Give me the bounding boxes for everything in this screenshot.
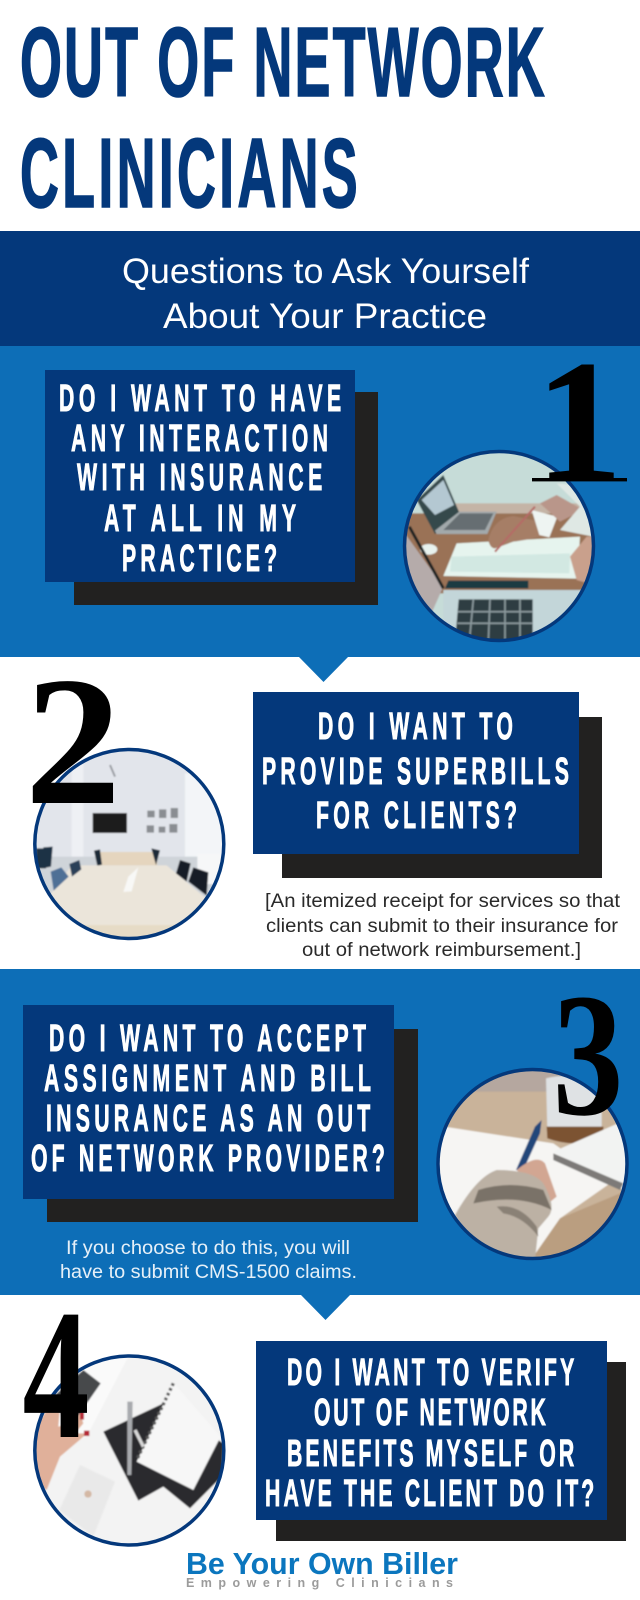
- question 4 box: BENEFITS MYSELF OR: [287, 1431, 574, 1475]
- question 1 box: WITH INSURANCE: [77, 455, 322, 499]
- photo: white conference room: [30, 743, 230, 950]
- number 4: 4: [23, 1273, 89, 1478]
- superbill explanation note: out of network reimbursement.]: [302, 939, 581, 961]
- title: [20, 7, 545, 228]
- question 2 box: PROVIDE SUPERBILLS: [262, 749, 569, 793]
- question 4 drop shadow: [276, 1362, 626, 1541]
- question 1 box: ANY INTERACTION: [71, 416, 328, 460]
- CMS-1500 note: [60, 1238, 357, 1283]
- question 4 box: OUT OF NETWORK: [314, 1390, 546, 1434]
- subtitle banner: Questions to Ask Yourself: [122, 252, 529, 291]
- question 4 box: HAVE THE CLIENT DO IT?: [265, 1471, 594, 1515]
- logo: Be Your Own Biller: Be Your Own Biller: [186, 1546, 458, 1581]
- question 2 box: [253, 692, 579, 854]
- question 3 box: DO I WANT TO ACCEPT: [49, 1016, 366, 1060]
- subtitle banner: [0, 231, 640, 346]
- subtitle banner: About Your Practice: [163, 297, 487, 336]
- question 1 drop shadow: [74, 392, 378, 605]
- number 1: 1: [535, 324, 623, 518]
- superbill explanation note: clients can submit to their insurance for: [266, 915, 619, 937]
- question 1 box: DO I WANT TO HAVE: [59, 376, 341, 420]
- superbill explanation note: [An itemized receipt for services so that: [265, 890, 621, 912]
- superbill explanation note: [265, 890, 621, 961]
- question 3 box: OF NETWORK PROVIDER?: [31, 1136, 385, 1180]
- panel: question 2: [32, 681, 620, 960]
- question 3 drop shadow: [47, 1029, 418, 1222]
- panel: question 3: [0, 958, 640, 1320]
- photo: desk with phone and notebook: [30, 1350, 230, 1550]
- CMS-1500 note: have to submit CMS-1500 claims.: [60, 1262, 357, 1283]
- question 3 box: INSURANCE AS AN OUT: [46, 1096, 370, 1140]
- question 1 box: AT ALL IN MY: [104, 496, 296, 540]
- question 1 box: [45, 370, 355, 582]
- photo: laptops and hand writing on paper: [397, 447, 603, 647]
- CMS-1500 note: If you choose to do this, you will: [66, 1238, 350, 1259]
- question 4 box: [256, 1341, 607, 1520]
- panel 1 background with pointer: [0, 346, 640, 682]
- question 2 box: FOR CLIENTS?: [316, 793, 517, 837]
- photo: hand writing with pen: [433, 1065, 633, 1265]
- question 1 box: PRACTICE?: [122, 536, 277, 580]
- question 3 box: [23, 1005, 394, 1199]
- number 2: 2: [25, 639, 121, 843]
- panel: question 1: [0, 324, 640, 682]
- title: CLINICIANS: [20, 118, 358, 228]
- logo: Be Your Own Biller: Empowering Clinicians: [186, 1576, 453, 1590]
- title: OUT OF NETWORK: [20, 7, 545, 117]
- question 2 box: DO I WANT TO: [318, 704, 513, 748]
- number 3: 3: [553, 958, 623, 1153]
- question 3 box: ASSIGNMENT AND BILL: [44, 1056, 371, 1100]
- panel 3 background with pointer: [0, 969, 640, 1320]
- question 4 box: DO I WANT TO VERIFY: [287, 1350, 575, 1394]
- panel: question 4: [24, 1314, 626, 1547]
- question 2 drop shadow: [282, 717, 602, 878]
